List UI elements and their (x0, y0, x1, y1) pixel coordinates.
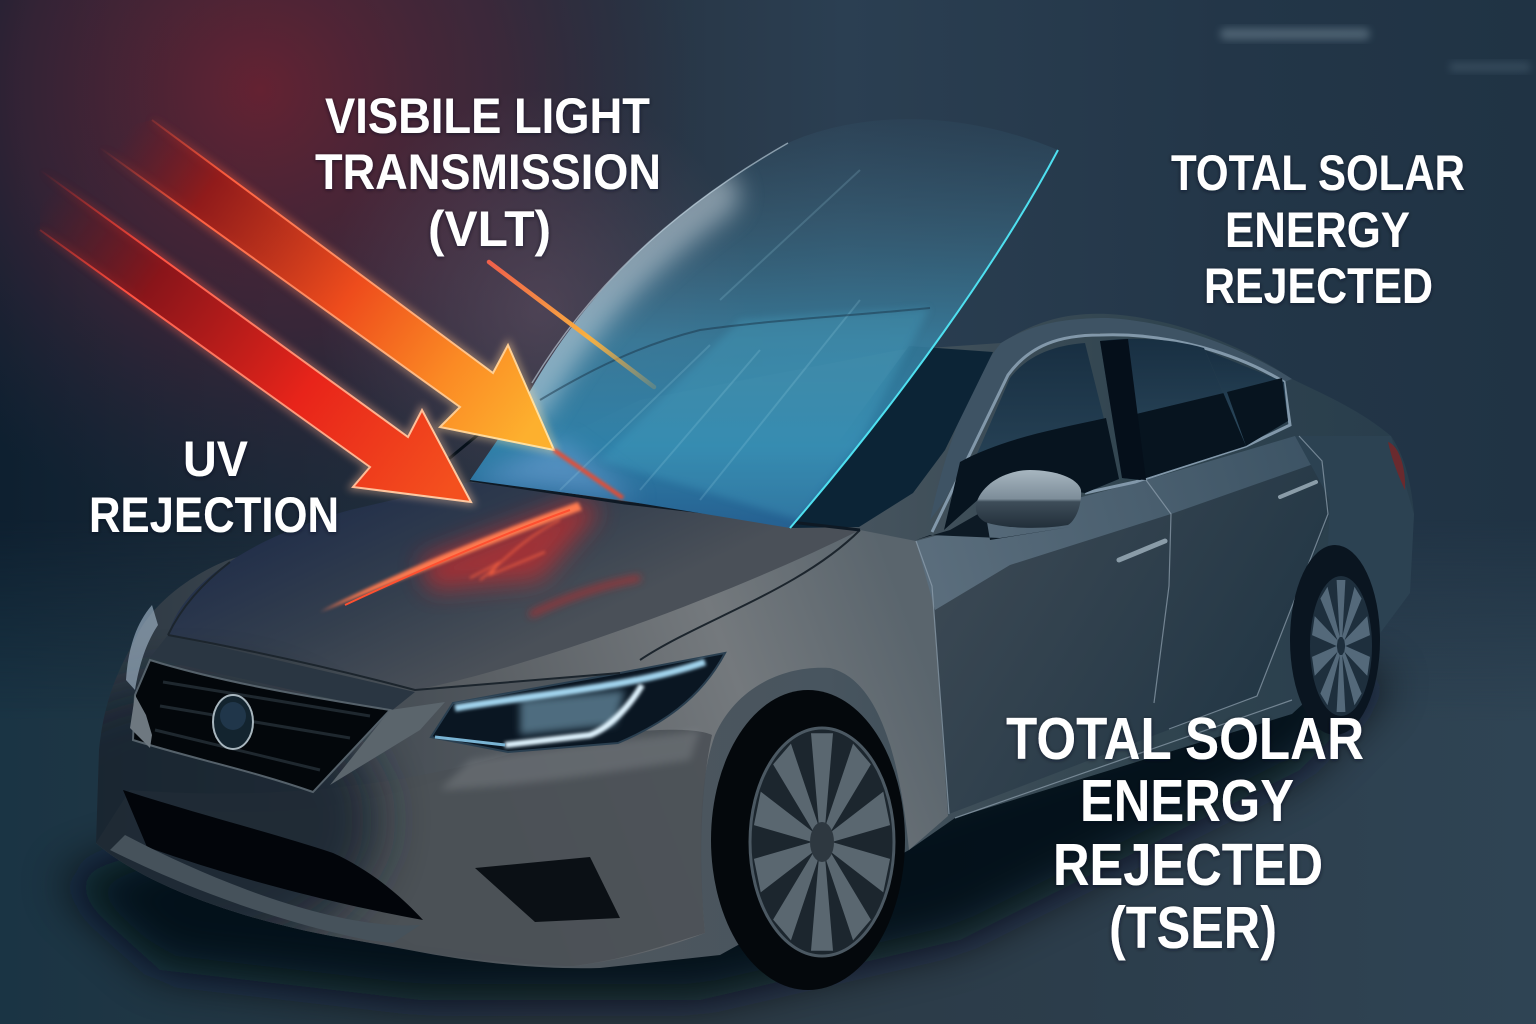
label: UV rejection: REJECTION (89, 487, 339, 543)
label: total solar energy rejected (upper) (1171, 145, 1465, 314)
side window trim (932, 335, 1290, 532)
label: total solar energy rejected TSER (lower) (1006, 706, 1364, 961)
side mirror (916, 470, 1081, 540)
arrow: visible light (85, 120, 654, 498)
left headlight sliver (126, 605, 158, 690)
glass light band (470, 170, 930, 520)
label: total solar energy rejected TSER (lower): TOTAL SOLAR (1006, 706, 1364, 772)
hood (168, 482, 860, 690)
label: total solar energy rejected (upper): TOTAL SOLAR (1171, 145, 1465, 201)
car body (96, 314, 1414, 968)
front fender (140, 530, 948, 966)
label: UV rejection: UV (183, 431, 249, 487)
car (0, 314, 1414, 990)
shoulder highlight (916, 436, 1322, 610)
label: total solar energy rejected TSER (lower): ENERGY (1080, 768, 1294, 834)
rear wheel (1290, 545, 1380, 735)
headlight (431, 653, 725, 752)
label: visible light transmission (315, 88, 661, 257)
front grille (130, 660, 390, 792)
rear quarter (1295, 436, 1414, 632)
label: total solar energy rejected TSER (lower): REJECTED (1053, 832, 1323, 898)
rear door window (1100, 339, 1246, 480)
label: UV rejection (89, 431, 339, 543)
fog lamp recess (475, 857, 620, 922)
red hood reflections (320, 500, 640, 615)
door handle: rear (1280, 482, 1316, 497)
windscreen base line (470, 480, 860, 530)
door handle: front (1119, 541, 1165, 560)
windshield film panel (445, 119, 1058, 528)
label: visible light transmission: TRANSMISSION (315, 144, 661, 200)
lower intake (110, 790, 423, 943)
lower bumper shading (96, 730, 712, 966)
label: total solar energy rejected TSER (lower): (TSER) (1109, 895, 1277, 961)
label: total solar energy rejected (upper): REJECTED (1204, 258, 1433, 314)
front wheel (711, 690, 905, 990)
door panels (932, 461, 1330, 814)
label: visible light transmission: (VLT) (428, 201, 551, 257)
arrow: UV (40, 170, 471, 502)
hood front edge (168, 530, 860, 690)
tail light (1388, 442, 1405, 490)
windshield interior (790, 346, 993, 528)
door seams (916, 436, 1328, 818)
label: visible light transmission: VISBILE LIGHT (325, 88, 650, 144)
light streak into glass (489, 262, 654, 387)
car shadow (60, 660, 1390, 1000)
refracted beam (554, 450, 623, 498)
grille side blade (330, 702, 445, 785)
label: total solar energy rejected (upper): ENERGY (1225, 202, 1410, 258)
roof (930, 318, 1292, 520)
left front darkening (0, 635, 700, 960)
front side window (944, 343, 1119, 530)
b-pillar (1100, 339, 1146, 480)
badge (213, 695, 253, 749)
quarter window (1205, 350, 1288, 446)
